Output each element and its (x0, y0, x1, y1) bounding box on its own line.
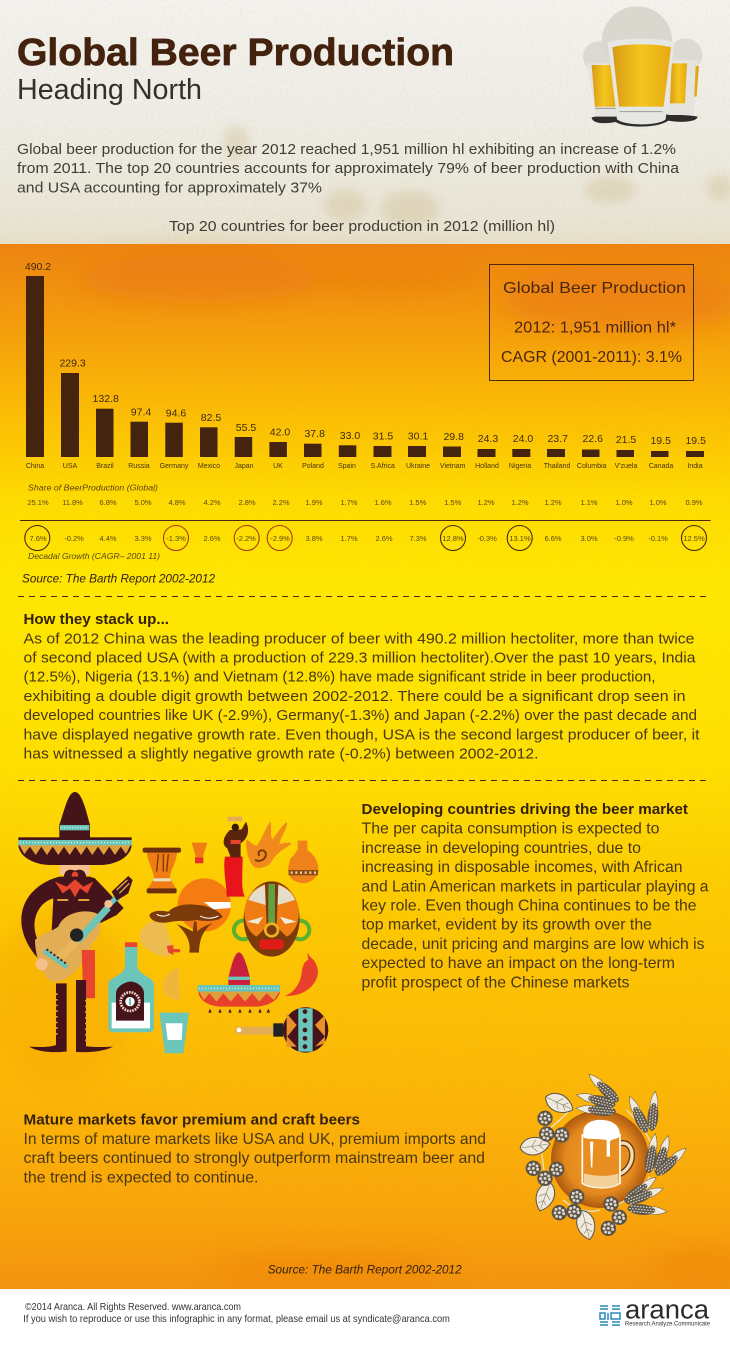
bottom source: Source: The Barth Report 2002-2012 (268, 1262, 462, 1276)
text block: mature markets (24, 1112, 486, 1186)
icon: mariachi with guitar (18, 792, 133, 1052)
text block: how they stack up: has witnessed a slightly negative growth rate (-0.2%) between 2002-2012. (24, 745, 538, 762)
bar values: 29.8 (443, 431, 464, 443)
decadal growth row: 1.7% (340, 534, 358, 543)
intro paragraph (17, 141, 680, 196)
country labels: USA (63, 463, 78, 470)
bar values: 229.3 (59, 358, 86, 370)
text block: mature markets: the trend is expected to continue. (24, 1169, 258, 1186)
icon: african woman (224, 817, 248, 897)
decadal growth row (25, 526, 707, 561)
text block: developing countries: Developing countries driving the beer market (362, 801, 688, 818)
decadal growth row: -0.1% (648, 534, 668, 543)
logo: aranca (600, 1294, 710, 1327)
share of production row: 1.9% (305, 498, 323, 507)
footer copyright (23, 1301, 450, 1325)
intro paragraph: from 2011. The top 20 countries accounts for approximately 79% of beer production with China (17, 160, 680, 177)
text block: mature markets: In terms of mature markets like USA and UK, premium imports and (24, 1131, 486, 1148)
text block: mature markets: Mature markets favor premium and craft beers (24, 1112, 360, 1129)
share of production row: 1.7% (340, 498, 358, 507)
country labels: UK (273, 463, 283, 470)
country labels: Brazil (96, 463, 114, 470)
share of production row: 4.2% (203, 498, 221, 507)
logo: aranca: Research.Analyze.Communicate (625, 1320, 710, 1327)
icon: tequila bottle (108, 942, 154, 1032)
icon: drums (143, 843, 207, 893)
country labels: Vietnam (440, 463, 466, 470)
share of production row: 4.8% (168, 498, 186, 507)
text block: how they stack up: of second placed USA (with a production of 229.3 million hectoliter).Over the past 10 years, India (24, 650, 696, 667)
country labels: Mexico (198, 463, 220, 470)
text block: how they stack up: (12.5%), Nigeria (13.1%) and Vietnam (12.8%) have made significant stride in beer production, (24, 669, 656, 686)
decadal growth row: 7.6% (29, 534, 47, 543)
share of production row: 25.1% (27, 498, 49, 507)
share of production row: 5.0% (134, 498, 152, 507)
bar values: 490.2 (25, 261, 51, 273)
icon: maraca (235, 1007, 328, 1053)
bar values: 132.8 (93, 393, 119, 405)
text block: how they stack up: exhibiting a double digit growth between 2002-2012. There could be a significant drop seen in (24, 688, 686, 705)
text block: developing countries: increase in developing countries, due to (362, 840, 641, 857)
bar values: 22.6 (582, 433, 603, 445)
bar values: 97.4 (131, 407, 151, 419)
text block: how they stack up: have displayed negative growth rate. Even though, USA is the second largest producer of beer, it (24, 726, 700, 743)
callout: global beer production: 2012: 1,951 million hl* (514, 320, 676, 337)
country labels: Spain (338, 463, 356, 470)
country labels: Japan (234, 463, 254, 470)
bar values: 82.5 (201, 412, 221, 424)
decadal growth row: 3.0% (580, 534, 598, 543)
bar values: 55.5 (236, 422, 256, 434)
country labels: Canada (649, 463, 673, 470)
text block: developing countries (362, 801, 709, 991)
icon: beer glasses (583, 6, 702, 127)
decadal growth row: -2.9% (270, 534, 290, 543)
chart title: Top 20 countries for beer production in 2012 (million hl) (169, 218, 555, 235)
decadal growth row: -1.3% (166, 534, 186, 543)
text block: developing countries: top market, evident by its growth over the (362, 917, 652, 934)
footer copyright: If you wish to reproduce or use this infographic in any format, please email us at syndicate@aranca.com (23, 1313, 450, 1325)
country labels: Thailand (544, 463, 571, 470)
text block: developing countries: The per capita consumption is expected to (362, 821, 660, 838)
country labels: Russia (128, 463, 150, 470)
icon: small sombrero (198, 952, 280, 1013)
share of production row (27, 483, 703, 507)
illustration: developing markets (18, 792, 328, 1053)
icon: beer mug wreath (519, 1070, 690, 1242)
footer copyright: ©2014 Aranca. All Rights Reserved. www.aranca.com (25, 1301, 241, 1313)
bar values: 30.1 (408, 431, 428, 443)
bar values: 24.0 (513, 433, 533, 445)
bar values: 21.5 (616, 434, 636, 446)
bar values: 94.6 (166, 408, 186, 420)
decadal growth row: 12.8% (442, 534, 464, 543)
share of production row: 1.0% (649, 498, 667, 507)
country labels: India (687, 463, 703, 470)
decadal growth row: 4.4% (99, 534, 117, 543)
bar values: 31.5 (373, 431, 393, 443)
share of production row: 0.9% (685, 498, 703, 507)
country labels: S.Africa (370, 463, 395, 470)
bar values: 19.5 (685, 435, 706, 447)
share of production row: 1.2% (544, 498, 562, 507)
text block: developing countries: expected to have an impact on the long-term (362, 955, 675, 972)
text block: developing countries: decade, unit pricing and margins are low which is (362, 936, 704, 953)
share of production row: 1.2% (477, 498, 495, 507)
chart source: Source: The Barth Report 2002-2012 (22, 572, 215, 586)
decadal growth row: 13.1% (509, 534, 531, 543)
icon: shot glass (159, 1013, 189, 1053)
share of production row: 1.2% (511, 498, 529, 507)
share of production row: Share of BeerProduction (Global) (28, 483, 158, 493)
title: Global Beer Production (17, 32, 454, 74)
text block: how they stack up: How they stack up... (24, 611, 169, 628)
country labels: Columbia (577, 463, 607, 470)
subtitle: Heading North (17, 74, 202, 106)
icon: lime and glass (139, 920, 180, 1000)
text block: developing countries: increasing in disposable incomes, with African (362, 859, 682, 876)
country labels (26, 463, 703, 470)
icon: chili pepper (285, 953, 318, 996)
text block: developing countries: and Latin American markets in particular playing a (362, 878, 709, 895)
logo: aranca: aranca (625, 1294, 710, 1324)
text block: mature markets: craft beers continued to strongly outperform mainstream beer and (24, 1150, 485, 1167)
share of production row: 2.8% (238, 498, 256, 507)
country labels: Nigeria (509, 463, 531, 470)
bars (26, 276, 704, 457)
share of production row: 1.1% (580, 498, 598, 507)
intro paragraph: Global beer production for the year 2012 reached 1,951 million hl exhibiting an increase of 1.2% (17, 141, 676, 158)
decadal growth row: -0.3% (477, 534, 497, 543)
decadal growth row: 7.3% (409, 534, 427, 543)
text block: how they stack up: developed countries like UK (-2.9%), Germany(-1.3%) and Japan (-2.2%) over the past decade and (24, 707, 697, 724)
decadal growth row: -2.2% (236, 534, 256, 543)
country labels: China (26, 463, 44, 470)
bar values: 19.5 (650, 435, 671, 447)
bar chart: top 20 countries (20, 261, 711, 561)
decadal growth row: 2.6% (375, 534, 393, 543)
bar values: 33.0 (340, 430, 360, 442)
bar values (25, 261, 706, 447)
share of production row: 1.5% (409, 498, 427, 507)
text block: how they stack up: As of 2012 China was the leading producer of beer with 490.2 million hectoliter, more than twice (24, 630, 694, 647)
bar values: 23.7 (547, 433, 568, 445)
text block: how they stack up (24, 611, 700, 762)
decadal growth row: 12.5% (683, 534, 705, 543)
share of production row: 1.0% (615, 498, 633, 507)
country labels: Holland (475, 463, 499, 470)
decadal growth row: -0.2% (64, 534, 84, 543)
share of production row: 1.6% (374, 498, 392, 507)
decadal growth row: 2.6% (203, 534, 221, 543)
icon: painted hand (246, 822, 292, 868)
callout: global beer production: CAGR (2001-2011): 3.1% (501, 349, 682, 366)
text block: developing countries: profit prospect of the Chinese markets (362, 974, 630, 991)
bar values: 24.3 (478, 433, 498, 445)
decadal growth row: 3.8% (305, 534, 323, 543)
decadal growth row: Decadal Growth (CAGR– 2001 11) (28, 551, 160, 561)
country labels: Germany (160, 463, 189, 470)
country labels: V'zuela (615, 463, 637, 470)
decadal growth row: -0.9% (614, 534, 634, 543)
callout: global beer production (490, 264, 694, 380)
country labels: Ukraine (406, 463, 430, 470)
callout: global beer production: Global Beer Production (503, 280, 686, 297)
country labels: Poland (302, 463, 324, 470)
intro paragraph: and USA accounting for approximately 37% (17, 180, 322, 196)
text block: developing countries: key role. Even though China continues to be the (362, 898, 697, 915)
share of production row: 11.8% (62, 498, 83, 507)
icon: clay vase (288, 841, 318, 883)
bar values: 42.0 (270, 427, 290, 439)
icon: tribal mask (234, 881, 309, 957)
share of production row: 6.8% (99, 498, 117, 507)
bar values: 37.8 (304, 428, 325, 440)
icon: sun and acacia tree (149, 878, 231, 953)
decadal growth row: 3.3% (134, 534, 152, 543)
share of production row: 1.5% (444, 498, 462, 507)
decadal growth row: 6.6% (544, 534, 562, 543)
share of production row: 2.2% (272, 498, 290, 507)
